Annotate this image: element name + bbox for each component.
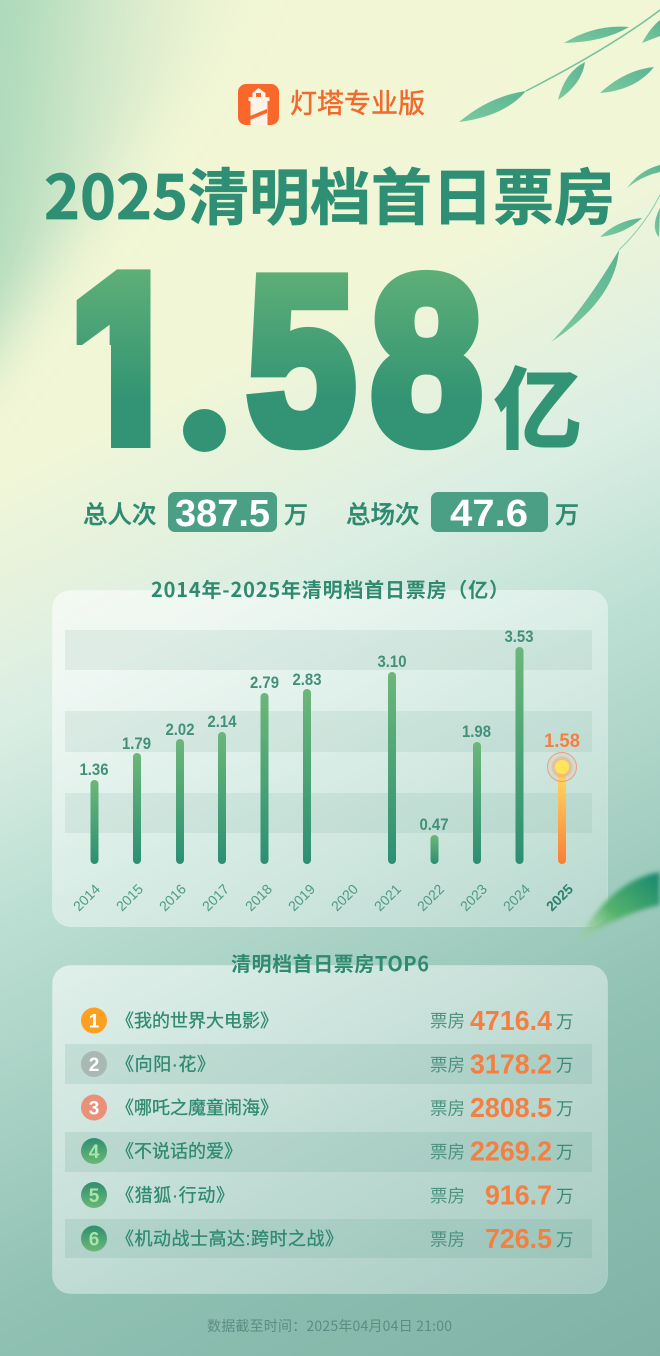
row 3 xyxy=(81,1092,574,1123)
bar chart: 0.47 xyxy=(420,816,448,834)
row 5 xyxy=(81,1180,574,1210)
row 5: 916.7 xyxy=(485,1180,552,1210)
main figure: 1.58亿: 8 xyxy=(371,230,482,492)
row 6: 6 xyxy=(89,1230,99,1250)
stat: total admissions xyxy=(83,492,308,535)
row 6: 726.5 xyxy=(485,1223,552,1254)
year axis labels: 2023 xyxy=(457,881,490,914)
stat: total screenings xyxy=(346,492,579,535)
row 6: 票房 xyxy=(430,1226,465,1252)
row 1: 万 xyxy=(556,1009,574,1034)
chart bands xyxy=(65,630,592,833)
row 4: 万 xyxy=(556,1140,574,1164)
title: 2025清明档首日票房 xyxy=(44,148,615,237)
year axis labels: 2017 xyxy=(199,881,232,914)
row 2: 万 xyxy=(556,1052,574,1078)
row 2: 2 xyxy=(89,1055,99,1076)
bar chart: 2.02 xyxy=(166,721,194,739)
row 2: 票房 xyxy=(430,1052,465,1077)
row 1: 4716.4 xyxy=(470,1005,552,1036)
bar chart: 3.53 xyxy=(504,628,534,646)
year axis labels: 2020 xyxy=(328,881,361,914)
footer: data timestamp: 数据截至时间：2025年04月04日 21:00 xyxy=(207,1316,452,1336)
year axis labels: 2014 xyxy=(70,881,103,914)
row 2: 3178.2 xyxy=(470,1048,552,1080)
stat: total screenings: 总场次 xyxy=(346,496,420,531)
bar chart: 1.98 xyxy=(462,723,491,741)
stat: total screenings: 万 xyxy=(555,495,579,530)
row 1 xyxy=(81,1005,574,1036)
year axis labels: 2021 xyxy=(371,881,404,914)
year axis labels: 2016 xyxy=(156,881,189,914)
row 2 xyxy=(81,1048,574,1080)
bar chart: 2.83 xyxy=(292,671,322,689)
row 3: 《哪吒之魔童闹海》 xyxy=(116,1098,278,1118)
row 1: 票房 xyxy=(430,1008,465,1033)
stat: total screenings: 47.6 xyxy=(450,493,528,535)
main figure: 1.58亿: 5 xyxy=(247,229,355,491)
row 4: 4 xyxy=(89,1142,100,1163)
row 6: 万 xyxy=(556,1227,574,1252)
stat: total admissions: 万 xyxy=(284,495,308,530)
bar chart: 1.79 xyxy=(122,735,151,753)
logo: 灯塔专业版 xyxy=(238,82,425,125)
bar chart: 1.58 xyxy=(544,731,580,752)
main figure: 1.58亿 xyxy=(76,269,580,452)
row 4: 2269.2 xyxy=(470,1136,552,1166)
year axis labels: 2019 xyxy=(285,881,318,914)
row 5: 万 xyxy=(556,1184,574,1208)
willow branch decoration xyxy=(459,10,660,342)
row 3: 3 xyxy=(89,1098,99,1120)
ranking heading: 清明档首日票房TOP6 xyxy=(231,948,429,977)
panel: yearly box office chart xyxy=(52,574,608,926)
row 5: 《猎狐·行动》 xyxy=(116,1186,234,1206)
year axis labels xyxy=(70,881,576,914)
row 4 xyxy=(81,1136,574,1166)
row bands xyxy=(65,1044,592,1258)
highlight marker 2025 xyxy=(548,752,576,782)
bar chart: 2.14 xyxy=(208,713,237,731)
year axis labels: 2018 xyxy=(242,881,275,914)
year axis labels: 2015 xyxy=(113,881,146,914)
row 5: 5 xyxy=(89,1186,100,1207)
row 2: 《向阳·花》 xyxy=(116,1054,215,1074)
row 3: 2808.5 xyxy=(470,1092,552,1123)
main figure: 1.58亿: 1 xyxy=(72,230,183,492)
row 1: 《我的世界大电影》 xyxy=(116,1011,278,1031)
year axis labels: 2022 xyxy=(414,881,447,914)
row 3: 票房 xyxy=(430,1096,465,1120)
row 4: 《不说话的爱》 xyxy=(116,1142,242,1162)
row 6 xyxy=(81,1223,574,1254)
row 4: 票房 xyxy=(430,1139,465,1164)
row 6: 《机动战士高达:跨时之战》 xyxy=(116,1229,343,1249)
bar chart xyxy=(80,628,580,864)
row 1: 1 xyxy=(89,1012,100,1032)
stat: total admissions: 总人次 xyxy=(83,496,156,531)
panel: top 6 ranking xyxy=(52,948,608,1294)
main figure: 1.58亿: 亿 xyxy=(494,340,582,467)
icon: lighthouse xyxy=(238,84,279,125)
row 5: 票房 xyxy=(430,1183,465,1208)
year axis labels: 2024 xyxy=(500,881,533,914)
bar chart: 3.10 xyxy=(378,653,406,671)
bar chart: 1.36 xyxy=(80,761,108,779)
stat: total admissions: 387.5 xyxy=(175,493,270,535)
year axis labels: 2025 xyxy=(543,881,576,914)
chart heading: 2014年-2025年清明档首日票房（亿） xyxy=(151,574,509,603)
blurred leaf at right edge xyxy=(575,872,660,945)
row 3: 万 xyxy=(556,1096,574,1121)
bar chart: 2.79 xyxy=(250,674,279,692)
logo: 灯塔专业版: 灯塔专业版 xyxy=(290,82,425,121)
